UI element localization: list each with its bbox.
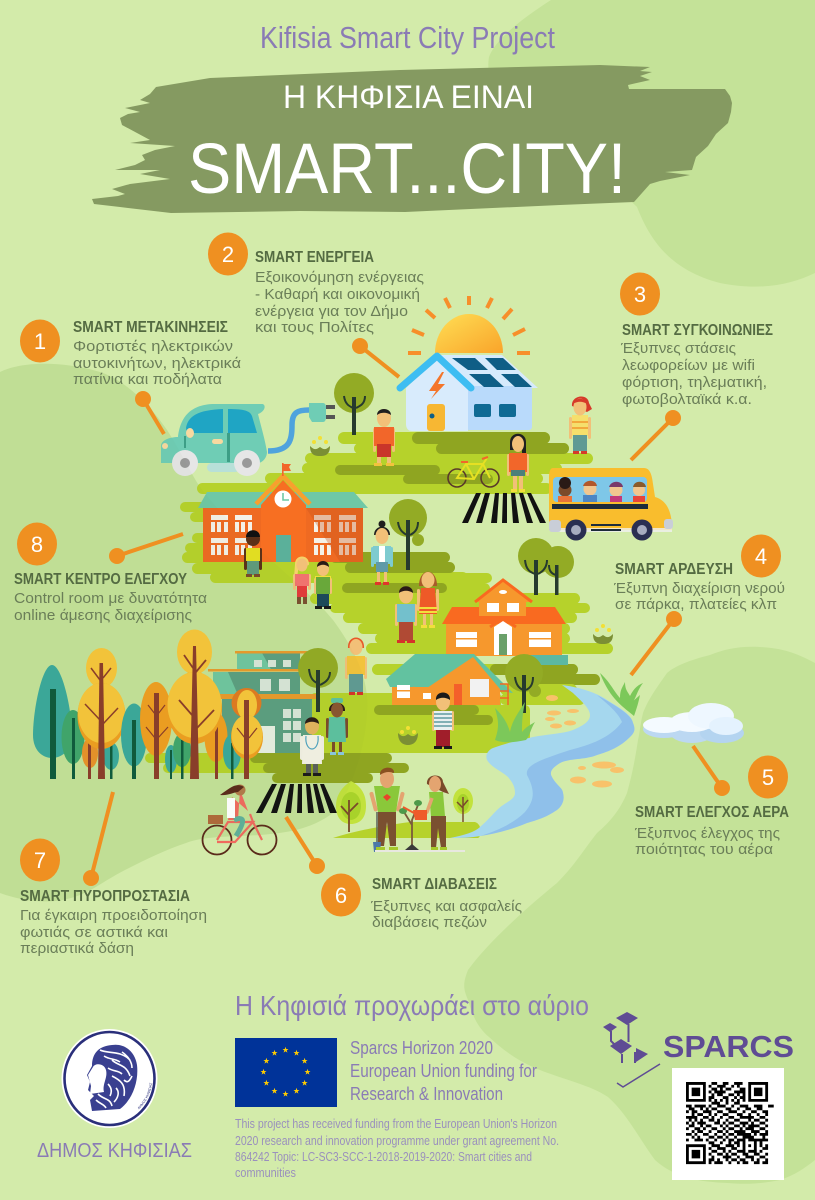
icon: school bus — [549, 468, 673, 540]
callout 6: smart crossings: 6 — [335, 883, 347, 908]
callout 3: smart transport: λεωφορείων με wifi — [622, 357, 755, 374]
callout 3: smart transport: Έξυπνες στάσεις — [620, 340, 736, 357]
grant disclaimer — [235, 1117, 559, 1180]
callout 2: smart energy — [208, 232, 424, 377]
icon: young tree being planted — [375, 800, 465, 852]
tree: beside woman — [389, 499, 427, 570]
ground strip for planting — [333, 822, 481, 838]
callout 3: smart transport: φωτοβολταϊκά κ.α. — [622, 391, 752, 408]
callout 2: smart energy: 2 — [222, 242, 234, 267]
funding statement: Sparcs Horizon 2020 — [350, 1038, 493, 1058]
callout 6: smart crossings: SMART ΔΙΑΒΑΣΕΙΣ — [372, 876, 497, 893]
heading line 1: Η ΚΗΦΙΣΙΑ ΕΙΝΑΙ — [283, 79, 534, 115]
icon: pedestrian crossing 2 — [256, 784, 337, 813]
translucent overlay of left blob — [0, 364, 367, 901]
title: project name: Kifisia Smart City Project — [260, 20, 555, 55]
callout 4: smart irrigation: 4 — [755, 544, 767, 569]
icon: small teal-roof house — [386, 654, 513, 705]
callout 3: smart transport: 3 — [634, 282, 646, 307]
background blob: top right — [488, 0, 815, 287]
footer heading: Η Κηφισιά προχωράει στο αύριο — [235, 990, 589, 1021]
callout 7: smart fire protection: περιαστικά δάση — [20, 940, 134, 957]
icon: river — [450, 685, 634, 838]
callout 2: smart energy: ενέργεια για τον Δήμο — [255, 303, 408, 320]
logo: municipality of Kifisia seal: ΔΗΜΟΣ ΚΗΦΙΣΙΑΣ — [138, 1082, 152, 1110]
icon: pedestrian crossing 1 — [462, 493, 546, 523]
callout 5: smart air control — [634, 746, 789, 858]
callout 5: smart air control: ποιότητας του αέρα — [635, 841, 773, 858]
callout 5: smart air control: SMART ΕΛΕΓΧΟΣ ΑΕΡΑ — [635, 804, 789, 821]
callout 1: smart mobility: πατίνια και ποδήλατα — [73, 371, 222, 388]
icon: flower pot lower — [398, 726, 418, 745]
tree: near car — [334, 373, 374, 435]
callout 7: smart fire protection: Για έγκαιρη προειδοποίηση — [20, 907, 207, 924]
callout 2: smart energy: και τους Πολίτες — [255, 319, 374, 336]
SPARCS wordmark: SPARCS — [663, 1029, 794, 1064]
person: man planting with shovel — [369, 768, 405, 852]
callout 7: smart fire protection: φωτιάς σε αστικά και — [20, 924, 168, 941]
callout 3: smart transport — [620, 272, 773, 460]
grant disclaimer: 2020 research and innovation programme under grant agreement No. — [235, 1134, 559, 1148]
tree: by small house — [505, 654, 543, 713]
ground: middle meadow — [295, 573, 613, 753]
callout 4: smart irrigation — [613, 534, 785, 675]
callout 6: smart crossings: διαβάσεις πεζών — [372, 914, 487, 931]
callout 4: smart irrigation: SMART ΑΡΔΕΥΣΗ — [615, 561, 733, 578]
QR code — [672, 1068, 784, 1180]
ground: hospital area — [145, 753, 409, 783]
callout 1: smart mobility: Φορτιστές ηλεκτρικών — [73, 338, 233, 355]
grant disclaimer: communities — [235, 1166, 296, 1180]
icon: grass by river — [600, 673, 643, 716]
callout 5: smart air control: Έξυπνος έλεγχος της — [634, 825, 780, 842]
callout 3: smart transport: SMART ΣΥΓΚΟΙΝΩΝΙΕΣ — [622, 322, 773, 339]
icon: grass by house — [495, 702, 535, 742]
person: man in red — [373, 409, 395, 466]
icon: sand stones — [545, 695, 624, 788]
person: boy in light blue — [395, 586, 417, 643]
grant disclaimer: 864242 Topic: LC-SC3-SCC-1-2018-2019-2020: Smart cities and — [235, 1150, 532, 1164]
icon: electric car — [161, 403, 335, 476]
trees: pair top right — [518, 538, 574, 595]
icon: flower pot middle — [593, 624, 613, 644]
callout 1: smart mobility — [20, 319, 241, 434]
icon: sapling left — [336, 781, 366, 832]
person: doctor — [300, 717, 324, 776]
person: woman in yellow — [345, 638, 367, 695]
person: nurse — [326, 698, 348, 755]
callout 7: smart fire protection: SMART ΠΥΡΟΠΡΟΣΤΑΣΙΑ — [20, 888, 190, 905]
callout 3: smart transport: φόρτιση, τηλεματική, — [622, 374, 767, 391]
background blob: left — [0, 364, 367, 901]
callout 8: smart control centre: Control room με δυνατότητα — [14, 590, 207, 607]
callout 8: smart control centre — [14, 522, 207, 624]
ground: upper meadow — [180, 432, 593, 583]
callout 2: smart energy: - Καθαρή και οικονομική — [255, 286, 420, 303]
callout 4: smart irrigation: Έξυπνη διαχείριση νερού — [613, 580, 785, 597]
person: girl in orange dress — [417, 572, 439, 628]
callout 2: smart energy: SMART ΕΝΕΡΓΕΙΑ — [255, 249, 374, 266]
icon: flower pot — [310, 436, 330, 456]
callout 6: smart crossings — [286, 817, 522, 931]
callout 8: smart control centre: SMART ΚΕΝΤΡΟ ΕΛΕΓΧΟΥ — [14, 571, 187, 588]
callout 7: smart fire protection: 7 — [34, 848, 46, 873]
brush stroke banner — [92, 65, 732, 213]
callout 1: smart mobility: 1 — [34, 329, 46, 354]
icon: woman on bicycle — [202, 784, 276, 854]
icon: solar house with sun — [400, 296, 538, 431]
callout 4: smart irrigation: σε πάρκα, πλατείες κλπ — [615, 596, 777, 613]
person: boy in stripes — [432, 692, 454, 749]
icon: EU flag — [235, 1038, 337, 1107]
background blob: right — [464, 647, 815, 1184]
callout 8: smart control centre: online άμεσης διαχείρισης — [14, 607, 192, 624]
callout 5: smart air control: 5 — [762, 765, 774, 790]
funding statement: Research & Innovation — [350, 1084, 503, 1104]
municipality name: ΔΗΜΟΣ ΚΗΦΙΣΙΑΣ — [37, 1140, 192, 1162]
callout 8: smart control centre: 8 — [31, 532, 43, 557]
person: boy in check vest — [314, 561, 332, 609]
icon: school building — [198, 463, 368, 562]
person: blonde girl — [293, 556, 311, 604]
callout 6: smart crossings: Έξυπνες και ασφαλείς — [370, 898, 522, 915]
icon: sapling right — [453, 788, 473, 822]
callout 1: smart mobility: αυτοκινήτων, ηλεκτρικά — [73, 355, 241, 372]
funding statement: European Union funding for — [350, 1061, 537, 1081]
icon: cloud — [643, 703, 744, 743]
person: girl with black hair — [507, 434, 529, 492]
callout 1: smart mobility: SMART ΜΕΤΑΚΙΝΗΣΕΙΣ — [73, 319, 228, 336]
person: woman in teal jacket — [371, 520, 393, 585]
icon: bicycle — [448, 457, 499, 487]
heading line 2: SMART...CITY! — [188, 130, 626, 209]
logo: municipality of Kifisia seal — [62, 1029, 158, 1128]
icon: autumn forest — [33, 630, 263, 779]
callout 7: smart fire protection — [20, 792, 207, 957]
icon: hospital building — [208, 651, 317, 753]
callout 2: smart energy: Εξοικονόμηση ενέργειας — [255, 269, 424, 286]
grant disclaimer: This project has received funding from the European Union's Horizon — [235, 1117, 557, 1131]
person: woman watering — [403, 775, 449, 850]
person: boy in yellow — [244, 530, 262, 577]
funding statement — [350, 1038, 537, 1104]
logo: SPARCS icon — [603, 1012, 660, 1087]
person: girl with red hair — [569, 397, 592, 454]
tree: by hospital — [298, 648, 338, 712]
icon: large house — [442, 580, 568, 665]
